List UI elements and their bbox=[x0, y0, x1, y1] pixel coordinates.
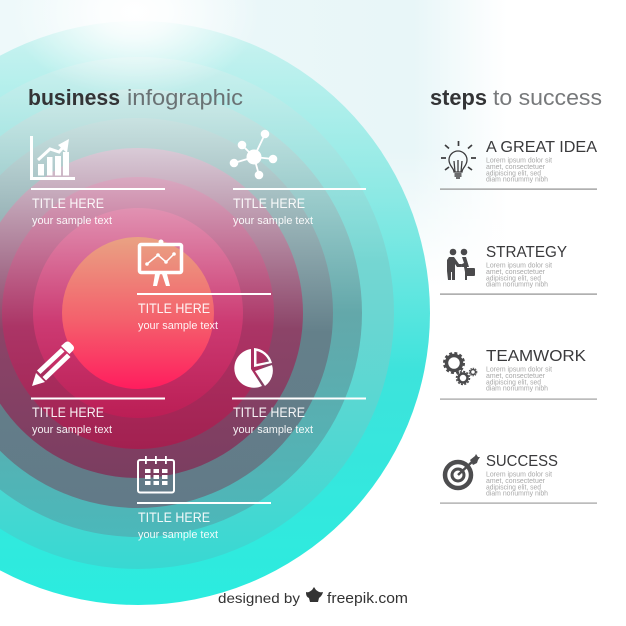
icon: growth chart bbox=[30, 136, 75, 180]
icon: freepik logo bbox=[306, 587, 323, 602]
panel: chart item: TITLE HERE bbox=[32, 196, 104, 211]
panel: a great idea: diam nonummy nibh bbox=[486, 174, 548, 184]
panel: teamwork bbox=[440, 348, 597, 400]
panel: chart item: your sample text bbox=[32, 215, 112, 227]
panel: network item: your sample text bbox=[233, 215, 313, 227]
panel: network item: TITLE HERE bbox=[233, 196, 305, 211]
panel: strategy bbox=[440, 244, 597, 295]
heading: steps to success: steps bbox=[430, 85, 487, 110]
panel: strategy: adipiscing elit, sed bbox=[486, 274, 541, 282]
panel: pie chart item: TITLE HERE bbox=[233, 405, 305, 420]
panel: network item bbox=[230, 130, 366, 227]
heading: steps to success bbox=[430, 85, 602, 110]
panel: strategy: diam nonummy nibh bbox=[486, 280, 548, 288]
panel: pencil item bbox=[31, 342, 165, 436]
panel: pie chart item: your sample text bbox=[233, 424, 313, 436]
panel: presentation item: your sample text bbox=[138, 320, 218, 332]
icon: target with arrow bbox=[445, 454, 480, 488]
icon: network bbox=[230, 130, 277, 179]
icon: presentation board bbox=[140, 240, 182, 286]
panel: teamwork: amet, consectetuer bbox=[486, 371, 545, 380]
panel: a great idea: A GREAT IDEA bbox=[486, 139, 597, 156]
footer credit: freepik.com bbox=[327, 591, 408, 607]
panel: success: adipiscing elit, sed bbox=[486, 482, 541, 492]
icon: pencil bbox=[32, 342, 74, 386]
footer credit bbox=[218, 587, 408, 607]
heading: business infographic: infographic bbox=[127, 85, 243, 110]
panel: calendar item bbox=[137, 456, 271, 541]
icon: handshake bbox=[447, 249, 475, 280]
panel: a great idea: amet, consectetuer bbox=[486, 162, 545, 171]
icon: gears bbox=[444, 353, 477, 384]
icon: calendar bbox=[138, 456, 174, 492]
panel: a great idea bbox=[440, 139, 597, 190]
heading: steps to success: to success bbox=[493, 85, 602, 110]
panel: chart item bbox=[30, 136, 165, 227]
panel: strategy: amet, consectetuer bbox=[486, 267, 545, 276]
panel: teamwork: adipiscing elit, sed bbox=[486, 378, 541, 386]
panel: teamwork: Lorem ipsum dolor sit bbox=[486, 364, 553, 374]
panel: success: diam nonummy nibh bbox=[486, 488, 548, 498]
panel: success: SUCCESS bbox=[486, 453, 558, 470]
panel: calendar item: TITLE HERE bbox=[138, 510, 210, 525]
panel: presentation item bbox=[137, 240, 271, 332]
panel: strategy: STRATEGY bbox=[486, 244, 567, 261]
panel: teamwork: diam nonummy nibh bbox=[486, 384, 548, 392]
panel: a great idea: adipiscing elit, sed bbox=[486, 168, 541, 178]
panel: pie chart item bbox=[232, 348, 366, 436]
panel: a great idea: Lorem ipsum dolor sit bbox=[486, 156, 553, 164]
panel: success bbox=[440, 453, 597, 504]
footer credit: designed by bbox=[218, 590, 300, 606]
heading: business infographic bbox=[28, 85, 243, 110]
panel: strategy: Lorem ipsum dolor sit bbox=[486, 260, 553, 270]
top light glow bbox=[10, 0, 260, 97]
panel: success: Lorem ipsum dolor sit bbox=[486, 470, 553, 478]
heading: business infographic: business bbox=[28, 85, 120, 110]
icon: light bulb bbox=[441, 141, 476, 178]
concentric circles bbox=[0, 21, 430, 605]
panel: calendar item: your sample text bbox=[138, 529, 218, 541]
panel: pencil item: TITLE HERE bbox=[32, 405, 104, 420]
panel: presentation item: TITLE HERE bbox=[138, 301, 210, 316]
panel: teamwork: TEAMWORK bbox=[486, 348, 586, 365]
panel: success: amet, consectetuer bbox=[486, 476, 545, 485]
icon: pie chart bbox=[234, 348, 273, 388]
panel: pencil item: your sample text bbox=[32, 424, 112, 436]
